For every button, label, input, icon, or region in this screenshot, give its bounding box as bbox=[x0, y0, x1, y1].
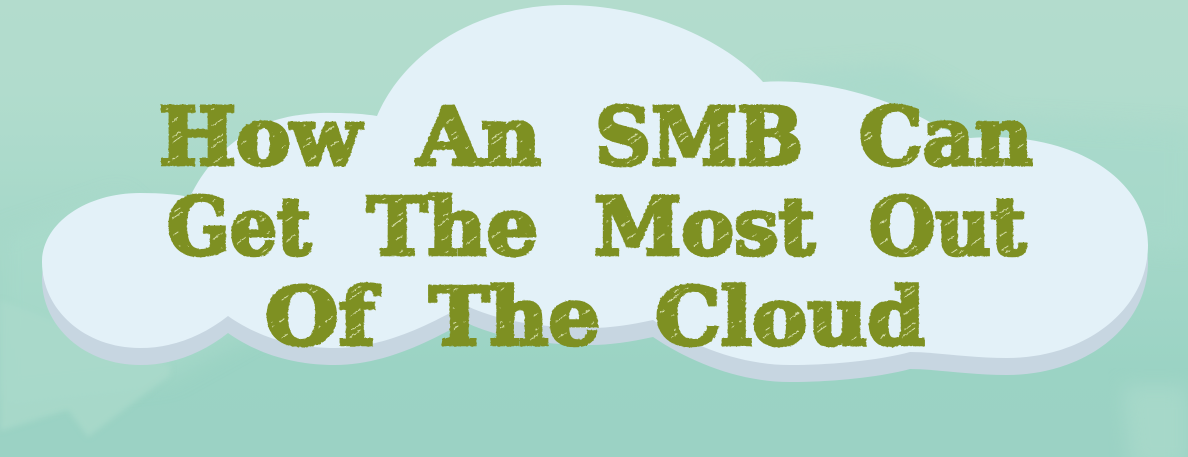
title: Get bbox=[167, 180, 311, 274]
cloud face bbox=[42, 5, 1148, 365]
cloud bbox=[42, 5, 1148, 382]
lighter speech-shaped facet, lower left bbox=[0, 300, 170, 437]
title: Of bbox=[265, 270, 380, 364]
title bbox=[159, 90, 1033, 364]
title: Out bbox=[869, 180, 1026, 274]
title: SMB bbox=[595, 90, 803, 184]
title: How bbox=[159, 90, 363, 184]
title: The bbox=[367, 180, 538, 274]
lighter facet, lower right bbox=[1122, 385, 1188, 457]
title: Most bbox=[594, 180, 815, 274]
cloud shadow edge bbox=[42, 22, 1148, 382]
title: Can bbox=[859, 90, 1033, 184]
title: The bbox=[429, 270, 600, 364]
title: Cloud bbox=[655, 270, 925, 364]
title: An bbox=[416, 90, 541, 184]
